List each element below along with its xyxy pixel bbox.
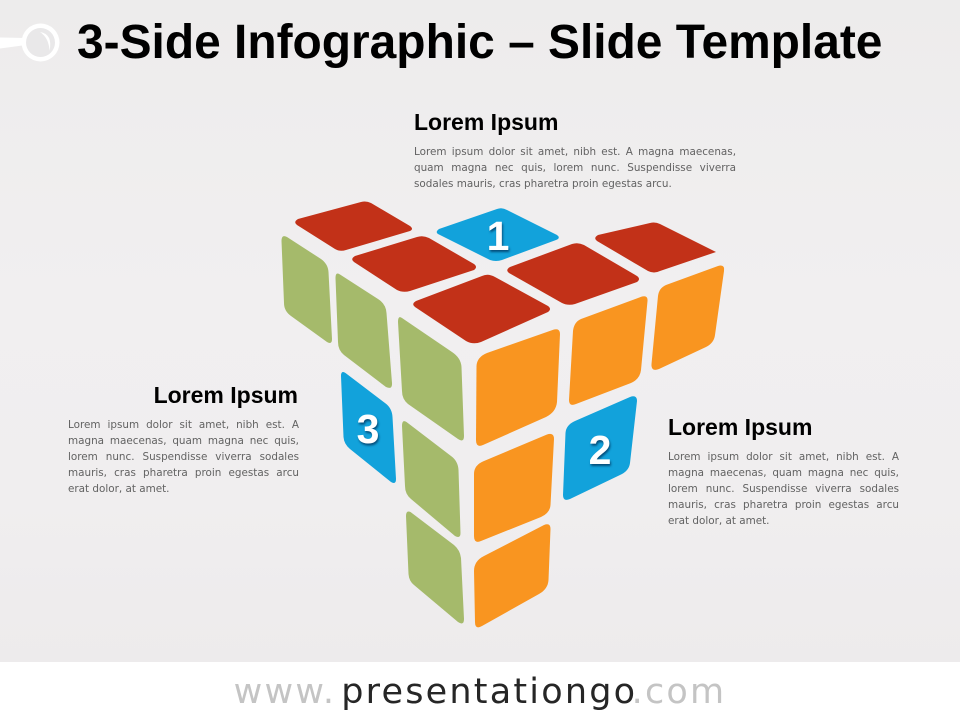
heading: right block: Lorem Ipsum bbox=[668, 414, 812, 440]
text block: top: Lorem ipsum dolor sit amet, nibh est. A magna maecenas, bbox=[414, 146, 736, 158]
text block: left: mauris, cras pharetra proin egestas arcu bbox=[68, 467, 299, 479]
icon: white ring with tab bbox=[0, 24, 60, 62]
text block: right: erat dolor, at amet. bbox=[668, 515, 770, 527]
text block: right: lorem nunc. Suspendisse viverra sodales bbox=[668, 483, 899, 495]
number 3: 3 bbox=[357, 406, 379, 452]
text block: right: magna maecenas, quam magna nec quis, bbox=[668, 467, 899, 479]
number 2: 2 bbox=[589, 427, 611, 473]
right face: orange and blue tiles bbox=[474, 266, 724, 627]
left face: green and blue tiles bbox=[282, 236, 464, 623]
number 1: 1 bbox=[487, 213, 509, 259]
text block: top: quam magna nec quis, lorem nunc. Suspendisse viverra bbox=[414, 162, 736, 174]
top face: red and blue tiles bbox=[295, 201, 716, 343]
text block: left: erat dolor, at amet. bbox=[68, 483, 170, 495]
text block: right bbox=[668, 451, 899, 527]
text block: right: Lorem ipsum dolor sit amet, nibh est. A bbox=[668, 451, 899, 463]
text block: left bbox=[68, 419, 299, 495]
title: 3-Side Infographic – Slide Template bbox=[77, 16, 882, 68]
text block: left: Lorem ipsum dolor sit amet, nibh est. A bbox=[68, 419, 299, 431]
heading: left block: Lorem Ipsum bbox=[154, 382, 298, 408]
text block: left: lorem nunc. Suspendisse viverra sodales bbox=[68, 451, 299, 463]
text block: right: mauris, cras pharetra proin egestas arcu bbox=[668, 499, 899, 511]
text block: top bbox=[414, 146, 736, 190]
text block: left: magna maecenas, quam magna nec quis, bbox=[68, 435, 299, 447]
footer: website url: www.presentationgo.com bbox=[234, 672, 726, 712]
text block: top: sodales mauris, cras pharetra proin egestas arcu. bbox=[414, 178, 672, 190]
heading: top block: Lorem Ipsum bbox=[414, 109, 558, 135]
